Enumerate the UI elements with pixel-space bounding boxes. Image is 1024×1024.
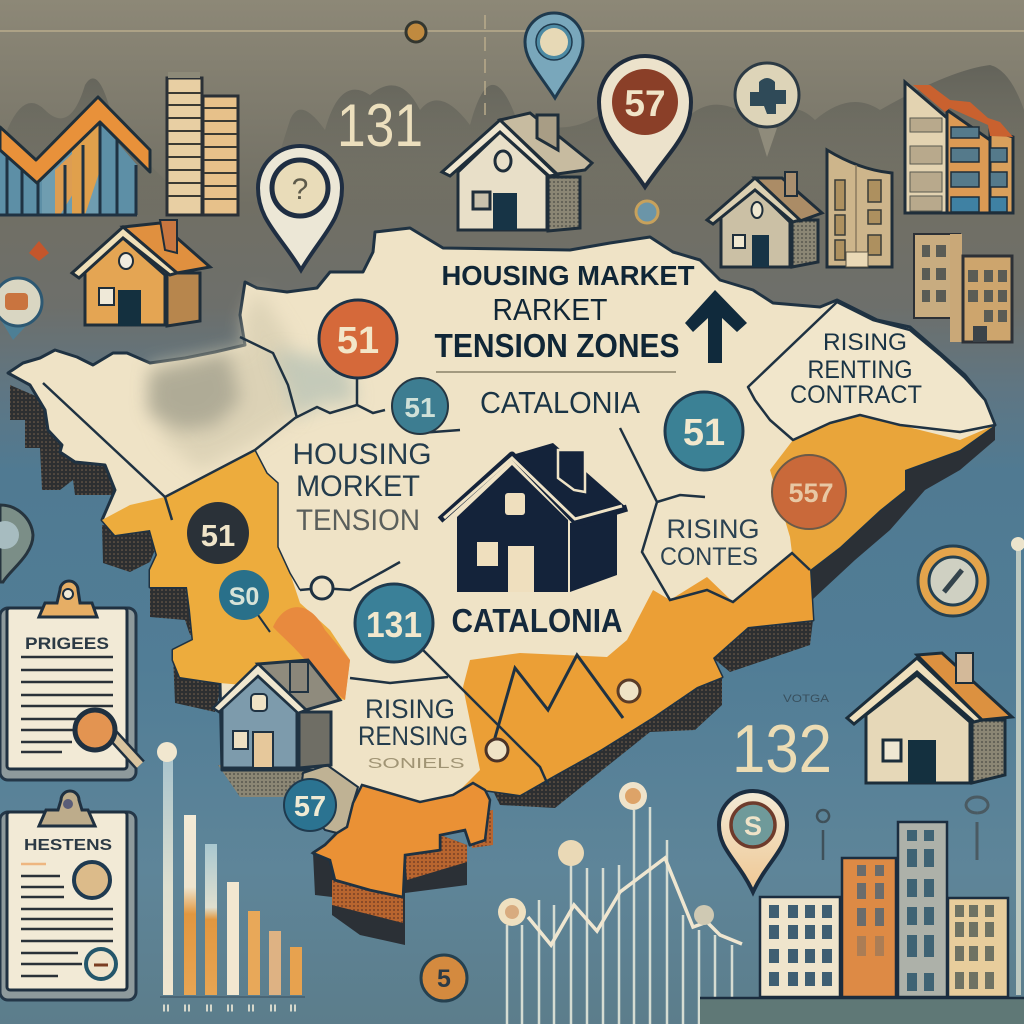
- blue wash: [273, 350, 358, 418]
- node circle: [311, 577, 333, 599]
- pin left: [258, 146, 342, 270]
- small disc under pin 57: [636, 201, 658, 223]
- line chart top left: [0, 97, 150, 215]
- map base: [8, 228, 995, 897]
- small text above 132: VOTGA: [783, 693, 830, 705]
- rising rensing label: RENSING: [358, 721, 468, 751]
- rising contes label: [660, 514, 760, 571]
- rising renting contract label: RISING: [823, 329, 907, 356]
- map node south: [486, 739, 508, 761]
- badge 57 orange: [772, 455, 846, 529]
- apartment block right: [914, 234, 1012, 342]
- vertical dashed line: [484, 15, 486, 115]
- badge 51 dark: [187, 502, 249, 564]
- badge 51 teal: [665, 392, 743, 470]
- rising rensing label: [358, 694, 468, 772]
- rising rensing label: SONIELS: [368, 755, 464, 772]
- title rule: [436, 371, 676, 373]
- map shade north-west: [150, 290, 297, 470]
- region borders: [43, 337, 810, 785]
- small figure right: [966, 797, 988, 860]
- main title: HOUSING MARKET: [442, 260, 694, 291]
- up arrow: [685, 290, 747, 363]
- clipboard title: HESTENS: [24, 837, 112, 854]
- badge 51 dark: 51: [201, 518, 235, 553]
- map node east: [618, 680, 640, 702]
- rising renting contract label: RENTING: [808, 356, 912, 384]
- house blue: [213, 660, 340, 768]
- top decorative line: [0, 30, 1024, 32]
- map extrusion: [10, 385, 995, 945]
- mini line on map: [490, 655, 623, 755]
- rising renting contract label: CONTRACT: [790, 381, 922, 409]
- small figure left: [817, 810, 829, 860]
- main title: RARKET: [492, 292, 608, 327]
- orange flare: [273, 607, 350, 700]
- house top centre: [442, 113, 592, 231]
- rising contes label: CONTES: [660, 543, 758, 571]
- pin right top: [735, 63, 799, 157]
- badge 51 orange: [319, 300, 397, 378]
- main title: TENSION ZONES: [434, 327, 680, 364]
- apartment block top right: [905, 82, 1013, 213]
- badge 51 orange: 51: [337, 320, 379, 362]
- pin top centre: [525, 13, 583, 98]
- small flame icon: [29, 241, 49, 261]
- rising renting region: [748, 302, 995, 440]
- clipboard prices: [0, 581, 140, 780]
- badge 131: [355, 584, 433, 662]
- number 132: 132: [732, 711, 832, 787]
- pin left: ?: [292, 173, 308, 206]
- housing market tension label: TENSION: [296, 504, 420, 537]
- badge right: [918, 546, 988, 616]
- house left orange: [72, 220, 210, 326]
- house bottom right: [847, 653, 1012, 783]
- clipboard badge small: [86, 949, 116, 979]
- rising renting contract label: [790, 329, 922, 409]
- building beige: [827, 150, 892, 267]
- orange zone east: [770, 415, 995, 570]
- central house icon: [440, 443, 627, 592]
- small pin left edge: [0, 278, 42, 340]
- city skyline bottom right: [700, 822, 1024, 998]
- rising contes label: RISING: [666, 514, 760, 544]
- grey smudge: [148, 352, 240, 430]
- pin bottom right: S: [744, 811, 762, 841]
- pin 57: [599, 56, 691, 187]
- central catalonia label: CATALONIA: [452, 602, 622, 639]
- housing market tension label: HOUSING: [292, 438, 432, 471]
- ground band: [700, 998, 1024, 1024]
- clipboard title: PRIGEES: [25, 634, 109, 653]
- grey zone: [300, 765, 358, 833]
- number 131: 131: [337, 92, 423, 159]
- bar chart: [157, 742, 305, 1008]
- badge 57 teal: 57: [294, 791, 326, 823]
- main title: [434, 260, 694, 364]
- clipboard badge: [74, 862, 110, 898]
- line chart bottom: [498, 782, 742, 1024]
- badge 5 bottom: [421, 955, 467, 1001]
- housing market tension label: [292, 438, 432, 537]
- pin bottom right: [719, 791, 787, 892]
- badge 5 bottom: 5: [437, 965, 451, 993]
- rising rensing label: RISING: [365, 694, 455, 724]
- badge 51 small: [392, 378, 448, 434]
- house top right: [707, 172, 822, 267]
- magnifier: [75, 710, 140, 765]
- right pole: [1011, 537, 1024, 995]
- clipboard hestens: [0, 791, 136, 1000]
- orange zone west: [102, 450, 350, 700]
- badge 57 orange: 557: [788, 478, 834, 508]
- housing market tension label: MORKET: [296, 470, 420, 503]
- badge 50: S0: [229, 583, 259, 611]
- top marker dot: [406, 22, 426, 42]
- badge 50: [219, 570, 270, 632]
- badge 131: 131: [366, 604, 422, 645]
- tower top left: [167, 72, 238, 215]
- left edge pin: [0, 505, 33, 582]
- badge 57 teal: [284, 779, 336, 831]
- catalonia label: CATALONIA: [480, 385, 640, 420]
- orange zone south: [313, 783, 490, 897]
- badge 51 teal: 51: [683, 412, 725, 454]
- orange zone south-east: [455, 553, 813, 795]
- badge 51 small: 51: [404, 392, 436, 423]
- background hills: [0, 65, 1024, 215]
- pin 57: 57: [624, 83, 666, 124]
